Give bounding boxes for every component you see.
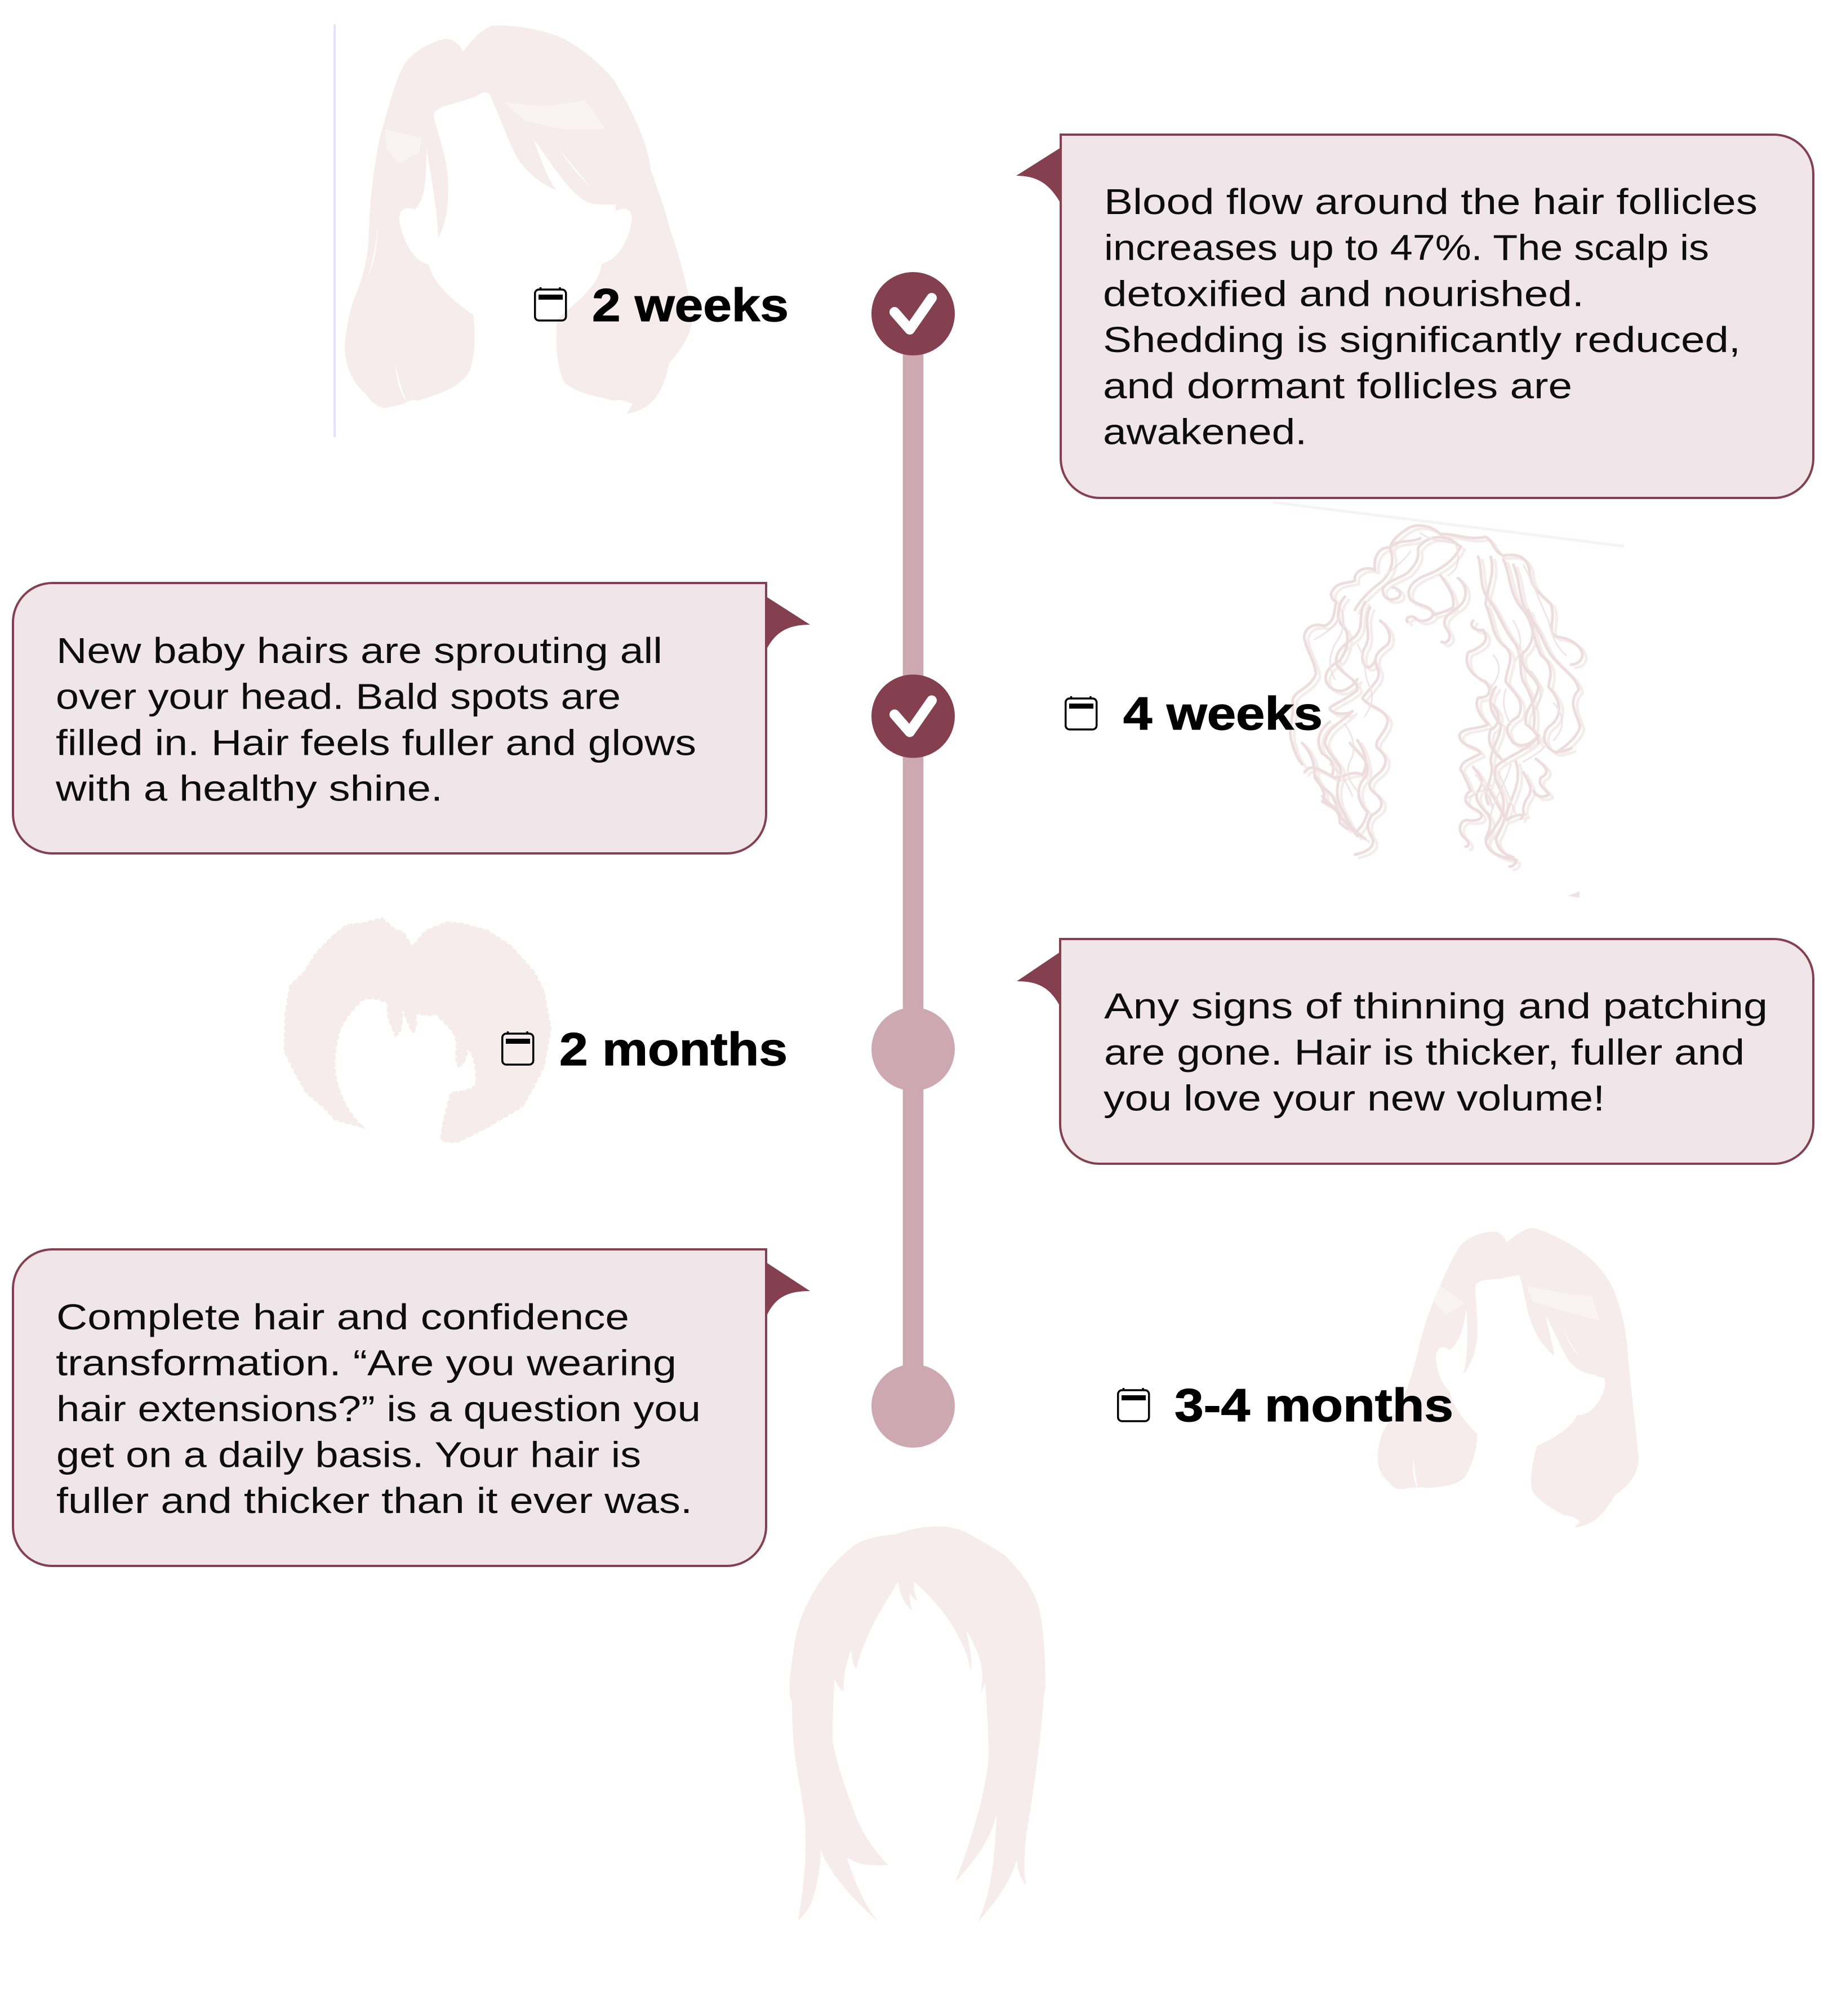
illustration: long straight hair top left [345,25,693,414]
text block: over your head. Bald spots are [56,677,621,717]
text block: transformation. “Are you wearing [56,1343,677,1383]
icon: calendar [535,287,566,321]
milestone: 4 weeks checked [871,675,955,758]
text block: are gone. Hair is thicker, fuller and [1104,1032,1745,1072]
timeline bar [903,349,923,1369]
text block: Blood flow around the hair follicles [1104,181,1758,222]
illustration: curly hair right [1273,502,1624,898]
heading: 2 weeks: 2 weeks [592,279,789,331]
heading: 2 months: 2 months [559,1023,788,1075]
text block: Any signs of thinning and patching [1104,986,1768,1026]
heading: 3-4 months: 3-4 months [1175,1379,1453,1431]
text block: you love your new volume! [1104,1078,1605,1119]
icon: calendar [502,1031,533,1065]
milestone: 3-4 months [871,1364,955,1448]
text block [56,1297,701,1521]
text block: Complete hair and confidence [56,1297,629,1337]
heading: 4 weeks: 4 weeks [1123,687,1323,740]
text block [1104,986,1768,1119]
text block: and dormant follicles are [1103,366,1572,406]
text block: Shedding is significantly reduced, [1103,319,1741,360]
text block: detoxified and nourished. [1103,273,1584,314]
illustration: afro hair left [285,919,550,1141]
milestone: 2 months [871,1007,955,1091]
text block: increases up to 47%. The scalp is [1104,228,1709,268]
panel: 2 weeks description [1016,135,1813,498]
text block: with a healthy shine. [55,768,443,809]
text block [1103,181,1758,452]
milestone: 2 weeks checked [871,272,955,355]
text block: hair extensions?” is a question you [56,1388,701,1429]
panel: 2 months description [1017,939,1813,1164]
text block: filled in. Hair feels fuller and glows [56,722,696,763]
label: 2 months [502,1023,788,1075]
panel: 4 weeks description [13,583,810,853]
text block: fuller and thicker than it ever was. [56,1480,692,1521]
label: 4 weeks [1066,687,1323,740]
text block [55,630,696,809]
icon: calendar [1066,696,1097,729]
icon: calendar [1118,1388,1149,1421]
illustration: shoulder-length hair bottom centre [790,1527,1046,1922]
label: 3-4 months [1118,1379,1453,1431]
panel: 3-4 months description [13,1249,810,1566]
label: 2 weeks [535,279,789,331]
text block: awakened. [1103,411,1307,452]
text block: New baby hairs are sprouting all [56,630,662,671]
illustration: long straight hair right [1378,1228,1639,1528]
text block: get on a daily basis. Your hair is [56,1434,641,1475]
